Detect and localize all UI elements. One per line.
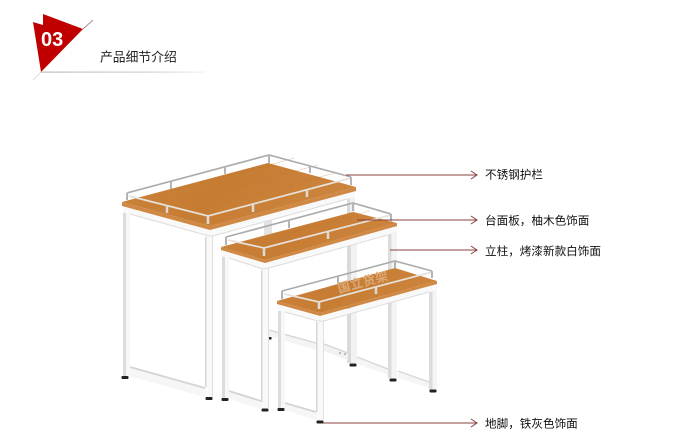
header underline [41, 72, 205, 73]
callout: table top [357, 214, 589, 228]
large table wooden top [122, 158, 356, 230]
callout: foot [323, 416, 578, 430]
section header badge [33, 14, 93, 80]
middle table guard rail [226, 203, 391, 256]
section number: 03 [41, 29, 63, 51]
middle table legs and frame [221, 212, 397, 412]
callout: stainless steel rail: 不锈钢护栏 [485, 168, 543, 182]
large table legs and frame [122, 190, 355, 400]
small table [269, 261, 437, 424]
callout: foot: 地脚，铁灰色饰面 [485, 416, 578, 430]
small table wooden top [277, 268, 437, 316]
callout: column: 立柱，烤漆新款白饰面 [485, 244, 601, 258]
small table guard rail [282, 261, 432, 309]
callout: column [390, 244, 601, 258]
callout: table top: 台面板，柚木色饰面 [485, 214, 589, 228]
watermark: 国立货架 [336, 268, 390, 296]
middle table wooden top [221, 211, 397, 263]
icon: red double triangle [33, 14, 83, 72]
callout: stainless steel rail [346, 168, 543, 182]
large table guard rail [127, 155, 351, 224]
small table legs and frame [269, 284, 437, 424]
section title: 产品细节介绍 [100, 50, 177, 64]
middle table [221, 203, 397, 412]
large table [122, 155, 356, 400]
